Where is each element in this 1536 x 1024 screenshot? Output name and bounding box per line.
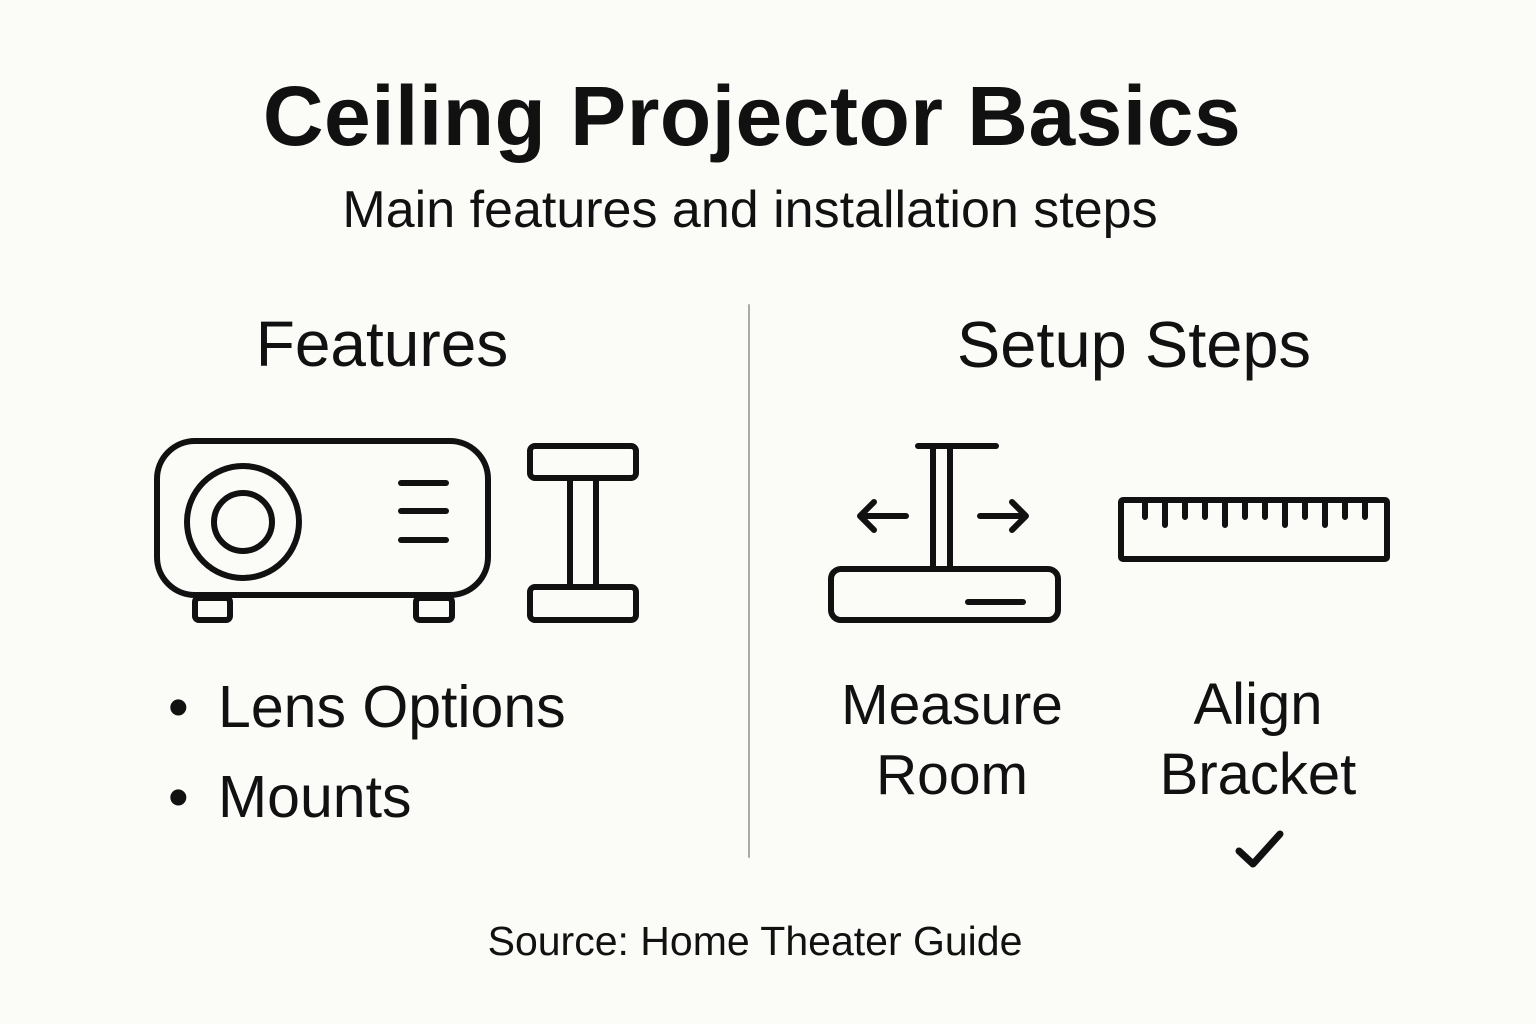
bullet list: features: Lens Options	[218, 674, 566, 740]
heading: Setup Steps: Setup Steps	[957, 308, 1311, 381]
icon: checkmark	[1239, 834, 1280, 864]
step label: Measure Room: Measure	[841, 673, 1063, 737]
bullet list: features: •	[168, 674, 189, 740]
icon: projector	[157, 441, 488, 620]
icon: mount	[530, 446, 636, 620]
bullet list: features	[168, 674, 566, 830]
bullet list: features: •	[168, 764, 189, 830]
subtitle: Main features and installation steps	[342, 181, 1158, 239]
step label: Align Bracket: Bracket	[1160, 742, 1356, 807]
step label: Measure Room: Room	[876, 743, 1028, 807]
bullet list: features: Mounts	[218, 764, 411, 830]
step label: Measure Room	[841, 673, 1063, 807]
step label: Align Bracket: Align	[1194, 672, 1322, 737]
icon: measure room	[831, 446, 1058, 620]
heading: Features: Features	[256, 308, 508, 380]
divider	[748, 305, 750, 857]
step label: Align Bracket	[1160, 672, 1356, 807]
source: Source: Home Theater Guide	[488, 918, 1022, 964]
icon: ruler	[1121, 500, 1387, 559]
title: Ceiling Projector Basics	[263, 69, 1241, 163]
